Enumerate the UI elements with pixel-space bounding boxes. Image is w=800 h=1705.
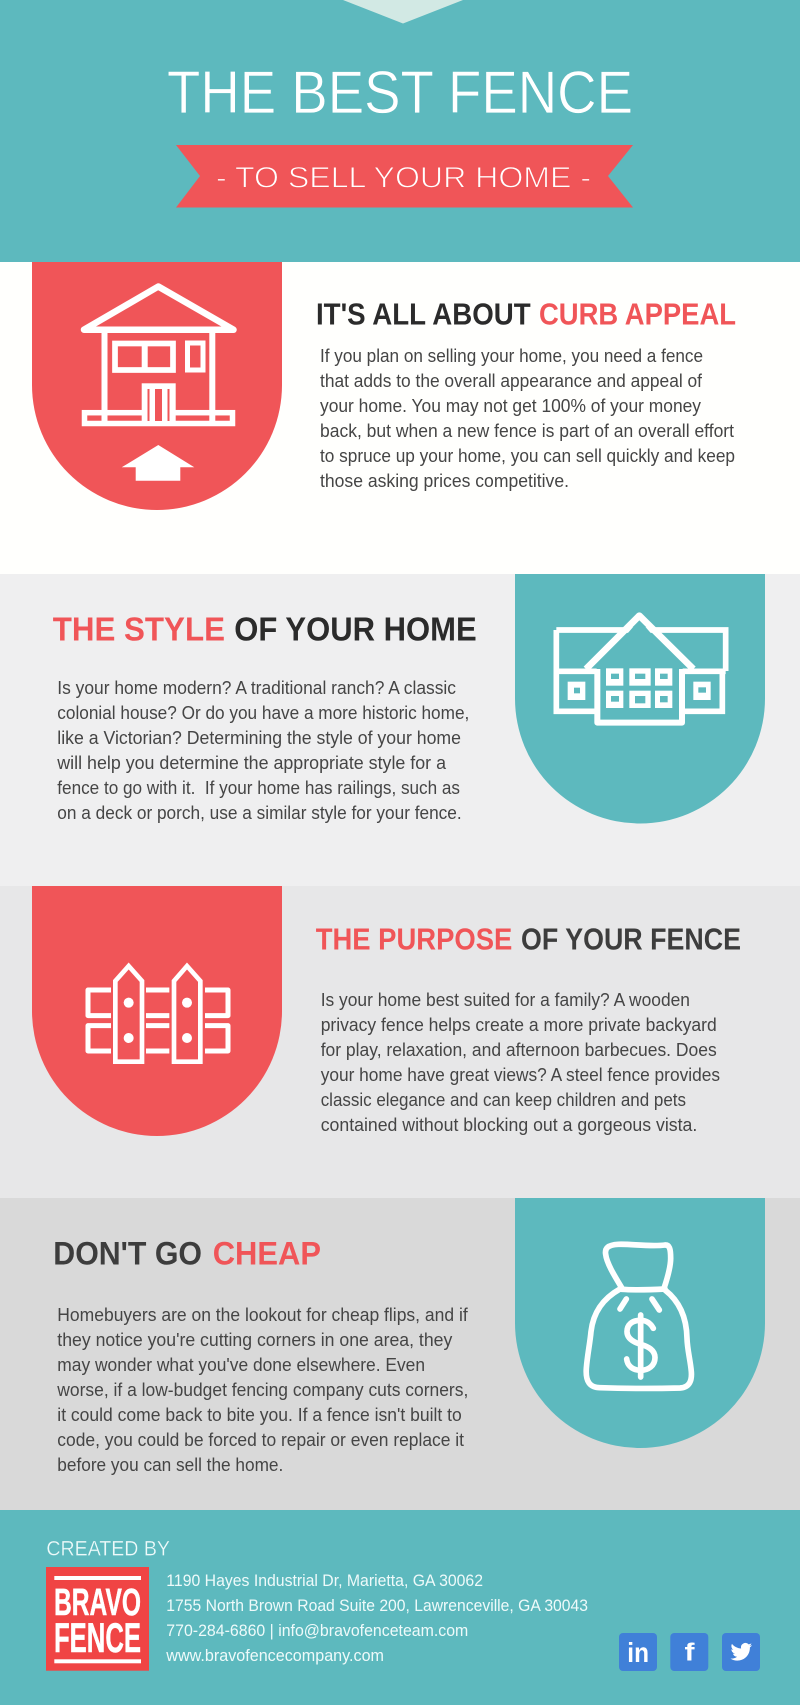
body text: like a Victorian? Determining the style of your home — [57, 728, 461, 748]
body text: back, but when a new fence is part of an overall effort — [320, 421, 734, 441]
heading — [316, 922, 741, 956]
icon: facebook: f — [684, 1638, 695, 1666]
ribbon banner — [176, 145, 633, 208]
body text: If you plan on selling your home, you need a fence — [320, 346, 703, 366]
heading: CURB APPEAL — [539, 298, 736, 332]
heading: IT'S ALL ABOUT — [316, 298, 531, 332]
title: THE BEST FENCE — [167, 59, 633, 126]
body text: before you can sell the home. — [57, 1455, 283, 1475]
body text: Is your home modern? A traditional ranch? A classic — [57, 678, 456, 698]
heading: THE STYLE — [53, 610, 225, 648]
panel: purpose of your fence — [0, 886, 800, 1198]
contact details: 1755 North Brown Road Suite 200, Lawrenceville, GA 30043 — [166, 1597, 588, 1615]
body text: that adds to the overall appearance and appeal of — [320, 371, 703, 391]
logo: Bravo Fence: BRAVO — [54, 1582, 141, 1624]
body text: your home. You may not get 100% of your money — [320, 396, 701, 416]
body text: those asking prices competitive. — [320, 471, 569, 491]
body text — [320, 346, 735, 491]
icon: fence — [88, 966, 228, 1062]
contact details: 770-284-6860 | info@bravofenceteam.com — [166, 1622, 468, 1640]
icon: linkedin — [619, 1633, 657, 1671]
body text: your home have great views? A steel fence provides — [321, 1065, 720, 1085]
heading: CHEAP — [213, 1236, 321, 1272]
body text: for play, relaxation, and afternoon barbecues. Does — [321, 1040, 717, 1060]
panel: don't go cheap — [0, 1198, 800, 1510]
body text: code, you could be forced to repair or even replace it — [57, 1430, 464, 1450]
contact details: www.bravofencecompany.com — [165, 1647, 384, 1665]
ribbon banner: - TO SELL YOUR HOME - — [216, 162, 591, 194]
body text — [321, 990, 720, 1135]
contact details — [165, 1572, 588, 1665]
body text: may wonder what you've done elsewhere. Even — [57, 1355, 425, 1375]
body text: will help you determine the appropriate style for a — [56, 753, 447, 773]
icon: linkedin: in — [627, 1637, 649, 1668]
heading — [53, 1236, 321, 1272]
heading: OF YOUR HOME — [234, 610, 477, 648]
body text — [56, 678, 469, 823]
body text: Is your home best suited for a family? A wooden — [321, 990, 690, 1010]
body text: worse, if a low-budget fencing company cuts corners, — [56, 1380, 468, 1400]
body text: privacy fence helps create a more private backyard — [321, 1015, 717, 1035]
header panel — [0, 0, 800, 262]
shield: teal — [515, 1198, 765, 1448]
heading: THE PURPOSE — [316, 922, 512, 956]
logo: Bravo Fence: FENCE — [54, 1614, 141, 1661]
body text: to spruce up your home, you can sell quickly and keep — [320, 446, 735, 466]
icon: large house — [556, 616, 726, 723]
body text: it could come back to bite you. If a fence isn't built to — [57, 1405, 462, 1425]
body text: colonial house? Or do you have a more historic home, — [57, 703, 469, 723]
body text: classic elegance and can keep children and pets — [321, 1090, 686, 1110]
contact details: 1190 Hayes Industrial Dr, Marietta, GA 30062 — [166, 1572, 483, 1590]
heading — [316, 298, 736, 332]
body text: fence to go with it. If your home has railings, such as — [57, 778, 460, 798]
created by label: CREATED BY — [46, 1538, 170, 1561]
shield: red — [32, 886, 282, 1136]
panel: style of your home — [0, 574, 800, 886]
logo: Bravo Fence — [46, 1567, 149, 1671]
panel: curb appeal — [0, 262, 800, 574]
icon: twitter — [722, 1633, 760, 1671]
body text: contained without blocking out a gorgeous vista. — [321, 1115, 697, 1135]
shield: red — [32, 262, 282, 510]
pentagon tab — [343, 0, 463, 24]
shield: teal — [515, 574, 765, 824]
body text: on a deck or porch, use a similar style for your fence. — [57, 803, 462, 823]
panel: footer — [0, 1510, 800, 1705]
body text: they notice you're cutting corners in one area, they — [57, 1330, 452, 1350]
heading: DON'T GO — [53, 1236, 202, 1272]
icon: money bag — [586, 1244, 691, 1388]
icon: facebook — [670, 1633, 708, 1671]
body text: Homebuyers are on the lookout for cheap flips, and if — [57, 1305, 469, 1325]
icon: house with arrow — [84, 286, 234, 481]
heading — [53, 610, 477, 648]
body text — [56, 1305, 469, 1475]
heading: OF YOUR FENCE — [521, 922, 741, 956]
